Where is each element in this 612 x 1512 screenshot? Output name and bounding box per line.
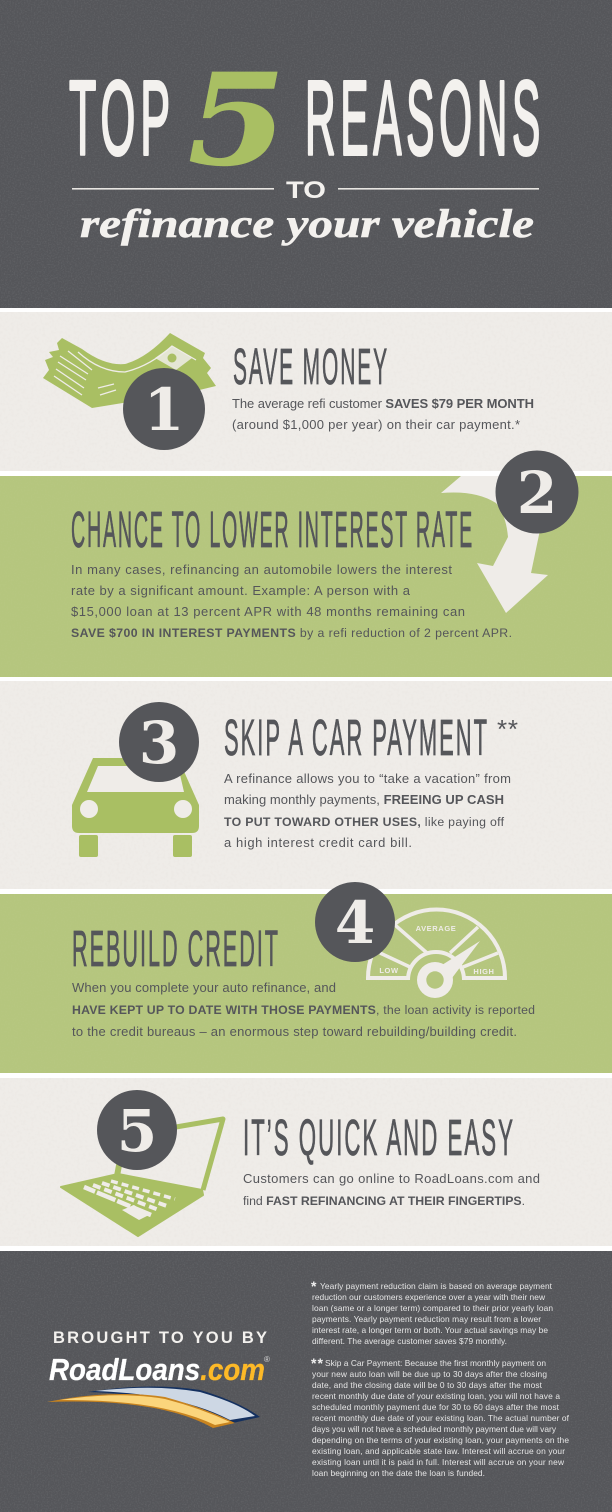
footnote 2: ** xyxy=(311,1355,324,1371)
text: rebuild credit body xyxy=(72,980,535,1039)
panel: reason 2 lower interest rate xyxy=(0,450,612,677)
footnote 1: interest rate, a longer term or both. Your actual savings may be xyxy=(312,1325,548,1335)
text: quick and easy body xyxy=(243,1171,540,1208)
panel: reason 5 quick and easy xyxy=(0,1078,612,1246)
panel: reason 3 skip a car payment xyxy=(0,681,612,889)
number badge 4 xyxy=(315,882,395,962)
icon: car xyxy=(72,758,199,857)
text: lower interest body: SAVE $700 IN INTEREST PAYMENTS by a refi reduction of 2 percent APR. xyxy=(71,626,512,640)
icon: credit gauge: LOW xyxy=(379,966,399,975)
text: rebuild credit body: HAVE KEPT UP TO DATE WITH THOSE PAYMENTS, the loan activity is reported xyxy=(72,1003,535,1017)
footnote 1: loan (same or a longer term) compared to their prior yearly loan xyxy=(312,1303,553,1313)
footnote 2: existing loan until it is paid in full. Interest will accrue on your new xyxy=(312,1457,565,1467)
footnote 2: days you will not have a scheduled monthly payment due will vary xyxy=(312,1424,557,1434)
text: skip a payment body: making monthly payments, FREEING UP CASH xyxy=(224,792,504,807)
number badge 1: 1 xyxy=(144,376,184,444)
text: quick and easy body: find FAST REFINANCING AT THEIR FINGERTIPS. xyxy=(243,1194,525,1208)
text: skip a payment body: a high interest credit card bill. xyxy=(224,835,412,850)
icon: down arrow xyxy=(441,476,548,613)
number badge 3 xyxy=(119,702,199,782)
number badge 2 xyxy=(496,450,578,534)
icon: credit gauge: AVERAGE xyxy=(416,924,456,933)
text: skip a payment body: TO PUT TOWARD OTHER USES, like paying off xyxy=(224,815,505,829)
text: save money body: (around $1,000 per year) on their car payment.* xyxy=(232,417,520,432)
number badge 3: 3 xyxy=(139,709,179,777)
footnote 1 xyxy=(311,1278,553,1346)
panel: reason 4 rebuild credit: REBUILD CREDIT xyxy=(72,920,280,977)
sponsor heading: BROUGHT TO YOU BY xyxy=(53,1329,267,1347)
icon: laptop xyxy=(61,1119,223,1236)
number badge 2: 2 xyxy=(517,459,557,527)
footnote 1: different. The average customer saves $79 monthly. xyxy=(312,1336,507,1346)
panel: reason 1 save money xyxy=(0,312,612,471)
text: lower interest body xyxy=(71,562,512,640)
number badge 4: 4 xyxy=(335,889,375,957)
text: lower interest body: $15,000 loan at 13 percent APR with 48 months remaining can xyxy=(71,604,465,619)
panel: reason 4 rebuild credit xyxy=(0,882,612,1073)
panel: footer xyxy=(0,1251,612,1512)
footnote 2: your new auto loan will be due up to 30 days after the closing xyxy=(312,1369,547,1379)
logo: RoadLoans.com: ® xyxy=(264,1355,270,1364)
footnote 2: recent monthly due date of your existing loan, you will not have a xyxy=(312,1391,560,1401)
footnote 2: depending on the terms of your existing loan, your payments on the xyxy=(312,1435,569,1445)
panel: title header: TOP xyxy=(69,60,175,178)
text: skip a payment body: A refinance allows you to “take a vacation” from xyxy=(224,771,511,786)
subtitle: refinance your vehicle xyxy=(80,201,534,246)
title: divider with TO: TO xyxy=(286,177,326,204)
footnote 2: Skip a Car Payment: Because the first monthly payment on xyxy=(325,1358,546,1368)
heading: skip a car payment: ** xyxy=(497,714,518,744)
footnote 2: loan beginning on the date the loan is funded. xyxy=(312,1468,485,1478)
logo: RoadLoans.com xyxy=(47,1352,270,1428)
footnote 1: * xyxy=(311,1278,317,1294)
title: green numeral 5: 5 xyxy=(172,46,301,194)
icon: credit gauge xyxy=(368,910,505,998)
footnote 1: payments. Yearly payment reduction may result from a lower xyxy=(312,1314,541,1324)
text: rebuild credit body: to the credit bureaus – an enormous step toward rebuilding/building credit. xyxy=(72,1024,517,1039)
number badge 5 xyxy=(97,1090,177,1170)
footnote 2: scheduled monthly payment due for 30 to 60 days after the most xyxy=(312,1402,560,1412)
footnote 2: recent monthly due date of your existing loan. The actual number of xyxy=(312,1413,570,1423)
text: lower interest body: rate by a significant amount. Example: A person with a xyxy=(71,583,411,598)
footnote 1: Yearly payment reduction claim is based on average payment xyxy=(320,1281,553,1291)
text: skip a payment body xyxy=(224,771,511,850)
number badge 5: 5 xyxy=(117,1097,157,1165)
footnote 2 xyxy=(311,1355,570,1478)
text: save money body: The average refi customer SAVES $79 PER MONTH xyxy=(232,396,534,411)
footnote 1: reduction our customers experience over a year with their new xyxy=(312,1292,546,1302)
panel: reason 1 save money: SAVE MONEY xyxy=(233,338,389,395)
footnote 2: existing loan, and applicable state law. Interest will accrue on your xyxy=(312,1446,565,1456)
icon: stack of money xyxy=(43,333,216,408)
number badge 1 xyxy=(123,368,205,450)
logo: RoadLoans.com: RoadLoans.com xyxy=(49,1352,265,1387)
text: save money body xyxy=(232,396,534,432)
footnote 2: date, and the closing date will be 0 to 30 days after the most xyxy=(312,1380,543,1390)
panel: title header xyxy=(0,0,612,308)
text: quick and easy body: Customers can go online to RoadLoans.com and xyxy=(243,1171,540,1186)
text: rebuild credit body: When you complete your auto refinance, and xyxy=(72,980,336,995)
text: lower interest body: In many cases, refinancing an automobile lowers the interest xyxy=(71,562,452,577)
icon: credit gauge: HIGH xyxy=(473,967,495,976)
